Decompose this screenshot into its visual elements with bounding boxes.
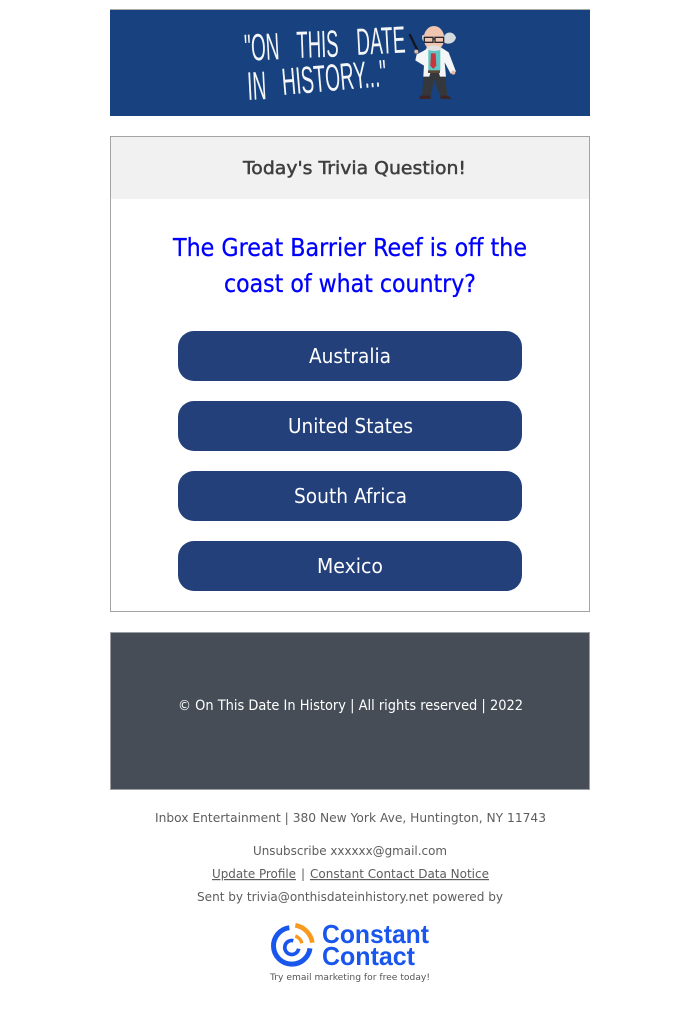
footer links: Update Profile bbox=[212, 867, 296, 881]
icon: logo rings bbox=[274, 925, 312, 964]
answer button: Mexico: Mexico bbox=[317, 554, 383, 578]
question panel bbox=[110, 136, 590, 612]
logo wordmark bbox=[322, 919, 429, 971]
answer button: South Africa: South Africa bbox=[294, 484, 407, 508]
question text: The Great Barrier Reef is off the bbox=[172, 233, 527, 262]
copyright panel bbox=[110, 632, 590, 790]
answer button: Mexico bbox=[178, 541, 522, 591]
footer links: Unsubscribe xxxxxx@gmail.com bbox=[253, 844, 447, 858]
footer links: | bbox=[301, 867, 305, 881]
question text: coast of what country? bbox=[224, 269, 476, 298]
copyright panel: © On This Date In History | All rights reserved | 2022 bbox=[178, 698, 523, 714]
banner title: IN bbox=[246, 64, 267, 109]
answer button: United States: United States bbox=[288, 414, 413, 438]
banner title: DATE bbox=[355, 19, 406, 64]
banner title: HISTORY..." bbox=[280, 53, 388, 104]
logo tagline: Try email marketing for free today! bbox=[269, 973, 430, 983]
footer address: Inbox Entertainment | 380 New York Ave, Huntington, NY 11743 bbox=[155, 811, 546, 825]
answer button: Australia bbox=[178, 331, 522, 381]
question text bbox=[172, 233, 527, 298]
panel heading: Today's Trivia Question! bbox=[242, 158, 466, 179]
footer links bbox=[197, 844, 503, 904]
banner title: THIS bbox=[296, 24, 339, 67]
footer links: Constant Contact Data Notice bbox=[310, 867, 489, 881]
answer button: Australia: Australia bbox=[309, 344, 391, 368]
banner title bbox=[243, 19, 406, 109]
panel heading bbox=[111, 137, 589, 199]
logo wordmark: Constant bbox=[322, 919, 429, 949]
banner title: "ON bbox=[243, 26, 280, 70]
icon: professor with pointer bbox=[410, 26, 456, 99]
Constant Contact logo bbox=[269, 919, 430, 983]
footer links: Sent by trivia@onthisdateinhistory.net powered by bbox=[197, 890, 503, 904]
header banner bbox=[110, 9, 590, 116]
answer button: South Africa bbox=[178, 471, 522, 521]
answer button: United States bbox=[178, 401, 522, 451]
logo wordmark: Contact bbox=[322, 941, 415, 971]
